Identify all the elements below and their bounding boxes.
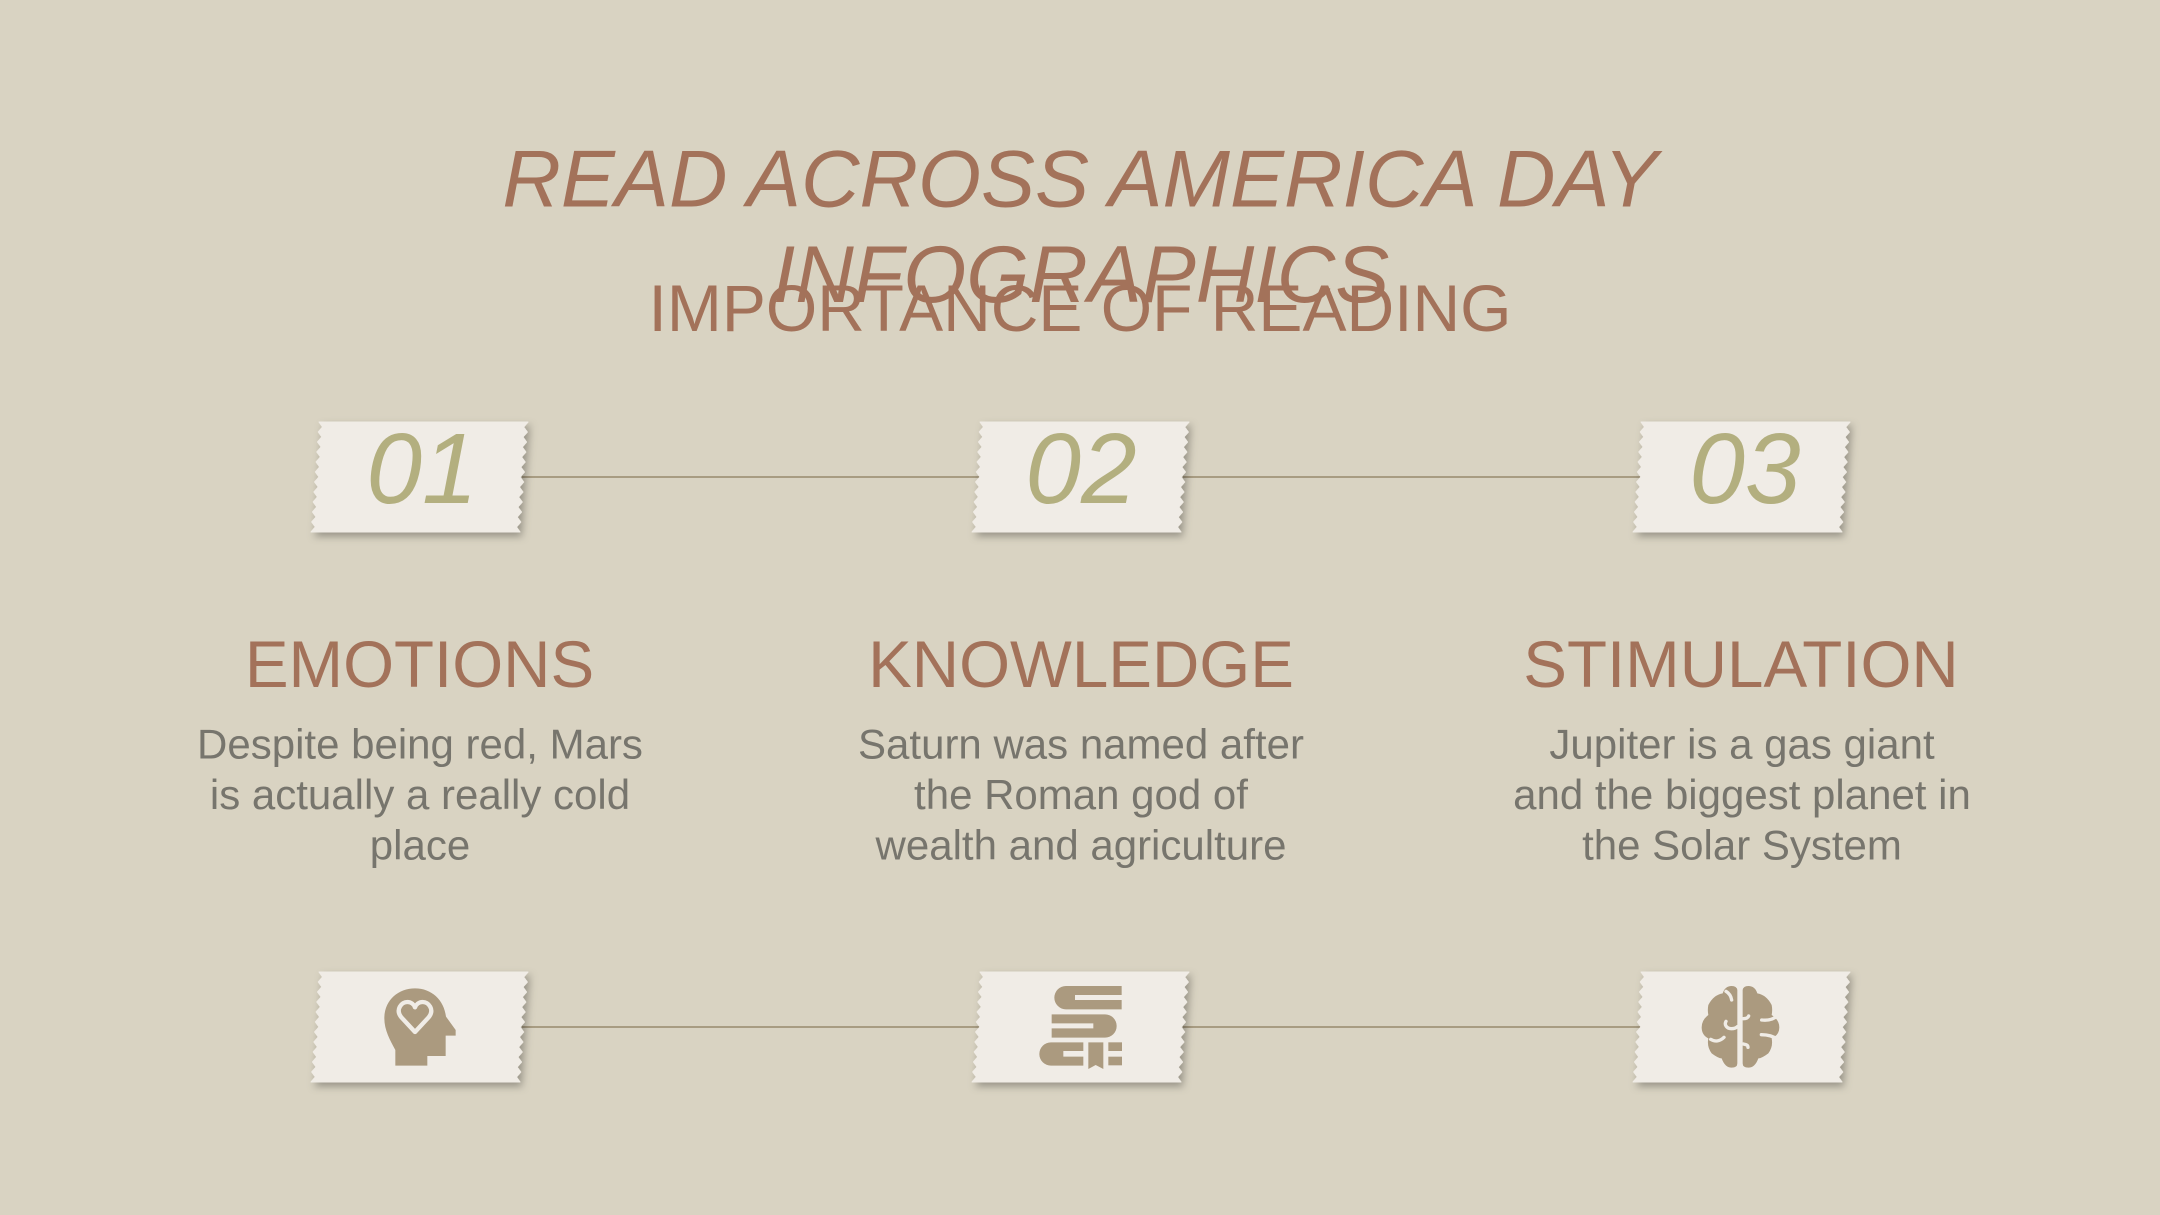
- text: emotions description: place: [370, 822, 470, 868]
- number tag 01: 01: [366, 413, 478, 525]
- icon: stack of books: [1039, 986, 1122, 1069]
- number tag 03: 03: [1689, 413, 1801, 525]
- text: emotions description: is actually a really cold: [210, 771, 630, 818]
- number tag 03: [1633, 413, 1850, 532]
- heading: knowledge: KNOWLEDGE: [868, 628, 1294, 701]
- icon tag: head with heart: [311, 972, 528, 1082]
- connector lines: top row: [522, 476, 1643, 478]
- text: knowledge description: the Roman god of: [914, 771, 1248, 818]
- icon tag: brain: [1633, 972, 1850, 1082]
- title: INFOGRAPHICS: [773, 230, 1389, 320]
- icon: brain: [1702, 986, 1779, 1068]
- text: knowledge description: Saturn was named after: [858, 720, 1304, 768]
- number tag 02: 02: [1025, 413, 1137, 525]
- heading: stimulation: STIMULATION: [1523, 628, 1959, 701]
- text: stimulation description: Jupiter is a gas giant: [1549, 720, 1935, 768]
- icon tag: books: [972, 972, 1189, 1082]
- text: knowledge description: [858, 720, 1304, 868]
- number tag 02: [972, 413, 1189, 532]
- text: stimulation description: and the biggest planet in: [1513, 771, 1971, 818]
- subtitle: IMPORTANCE OF READING: [649, 271, 1511, 345]
- icon: head with heart: [384, 988, 456, 1066]
- text: knowledge description: wealth and agriculture: [875, 822, 1286, 868]
- text: stimulation description: the Solar System: [1582, 822, 1902, 868]
- column: knowledge: [858, 628, 1304, 868]
- title: [502, 134, 1663, 320]
- title: READ ACROSS AMERICA DAY: [502, 134, 1663, 224]
- connector lines: bottom row: [522, 1026, 1643, 1028]
- column: emotions: [197, 628, 643, 868]
- text: emotions description: [197, 720, 643, 868]
- column: stimulation: [1513, 628, 1971, 868]
- text: stimulation description: [1513, 720, 1971, 868]
- text: emotions description: Despite being red, Mars: [197, 720, 643, 768]
- heading: emotions: EMOTIONS: [245, 628, 594, 701]
- number tag 01: [311, 413, 528, 532]
